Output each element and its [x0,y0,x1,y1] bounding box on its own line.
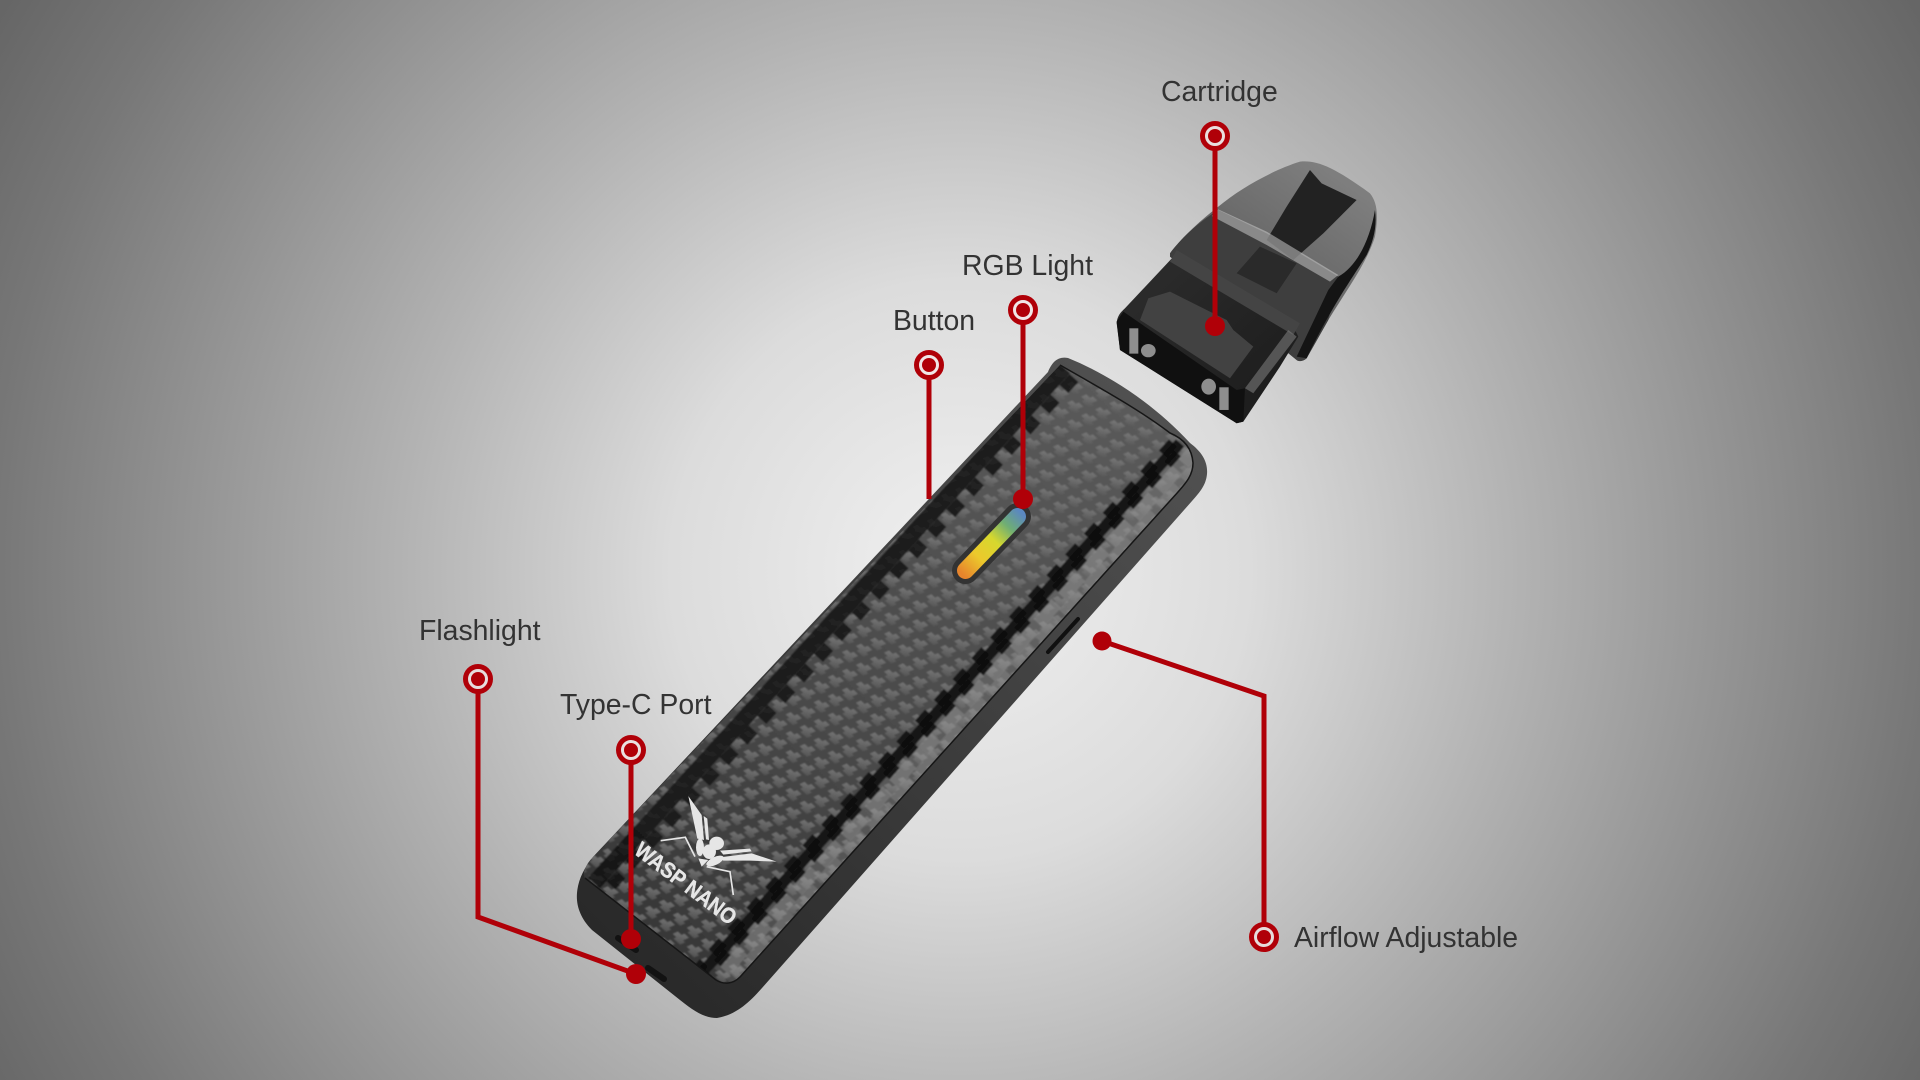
callout: Flashlight [419,615,646,984]
callout: Cartridge [1161,76,1278,336]
right light weave band [719,443,1216,977]
left dark weave band [594,368,1074,893]
cartridge side highlight [1245,330,1297,393]
callout: Type-C Port: Type-C Port [560,689,712,721]
right dark weave band [691,443,1187,977]
cartridge end face [1117,312,1245,423]
cartridge ribbon [1170,250,1300,335]
carbon fibre face [584,365,1192,982]
logo: product name: WASP NANO [630,837,742,930]
callout: RGB Light: RGB Light [962,250,1093,282]
RGB light window [966,516,1018,570]
callout: Type-C Port [560,689,712,949]
callout: Airflow Adjustable [1092,632,1518,954]
cartridge dome [1170,161,1377,361]
cartridge lower block [1117,255,1298,423]
device body [576,358,1208,1018]
cartridge lower dome shade [1170,210,1338,361]
cartridge right shadow [1297,210,1376,358]
inner rim line [585,365,1193,983]
callout: Airflow Adjustable: Airflow Adjustable [1294,922,1518,954]
cartridge light band [1212,209,1338,282]
logo: wasp mark [661,796,777,895]
cartridge contacts [1129,328,1229,410]
cartridge top panel [1140,292,1253,378]
device shell [577,358,1207,1018]
charging port and flashlight slots [618,938,664,979]
cartridge [1117,161,1377,423]
cartridge inner tube [1237,247,1297,293]
callout: Cartridge: Cartridge [1161,76,1278,108]
cartridge chimney [1267,170,1357,260]
airflow slot [1048,619,1078,652]
callout: Button [893,305,975,499]
callout: Button: Button [893,305,975,337]
callout: Flashlight: Flashlight [419,615,541,647]
callout: RGB Light [962,250,1093,509]
